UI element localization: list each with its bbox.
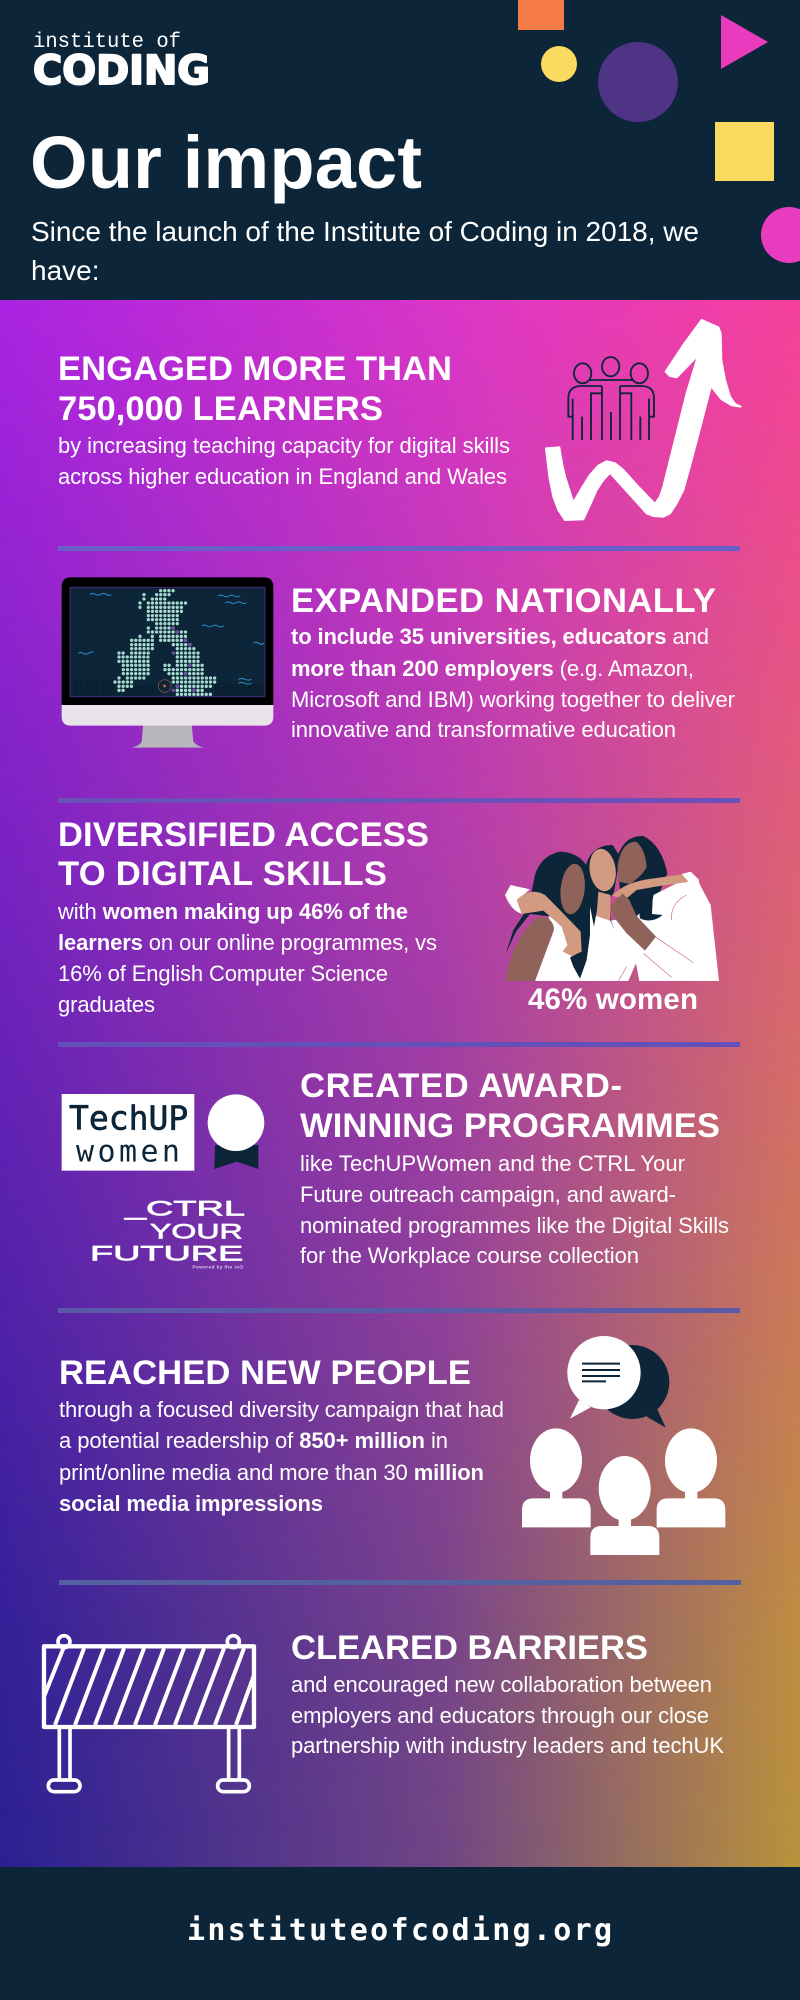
logo: CTRL your future: FUTURE xyxy=(90,1242,243,1266)
panel: cleared barriers xyxy=(44,1629,724,1792)
divider xyxy=(58,798,740,803)
text block: social media impressions xyxy=(59,1491,323,1516)
panel: diversified access xyxy=(57,816,719,1017)
text block: a potential readership of 850+ million in xyxy=(59,1428,448,1453)
title: Our impact xyxy=(30,121,422,204)
text block: and encouraged new collaboration between xyxy=(291,1672,712,1697)
text block xyxy=(59,1397,504,1516)
heading: REACHED NEW PEOPLE xyxy=(59,1354,471,1392)
logo: CTRL your future: _CTRL xyxy=(123,1197,245,1221)
heading: 750,000 LEARNERS xyxy=(58,390,383,428)
heading xyxy=(58,816,429,893)
text block: Microsoft and IBM) working together to deliver xyxy=(291,687,735,712)
heading xyxy=(300,1067,720,1145)
text block: across higher education in England and Wales xyxy=(58,464,507,489)
text block: with women making up 46% of the xyxy=(57,899,408,924)
panel: reached new people xyxy=(59,1336,725,1555)
icon: speech bubbles xyxy=(567,1336,669,1428)
text block xyxy=(300,1151,729,1268)
heading: CREATED AWARD- xyxy=(300,1067,622,1105)
text block: like TechUPWomen and the CTRL Your xyxy=(300,1151,685,1176)
text block xyxy=(57,899,437,1017)
text block xyxy=(291,1672,724,1758)
logo: TechUP women: women xyxy=(76,1135,180,1170)
heading xyxy=(58,350,452,428)
logo: CTRL your future: YOUR xyxy=(150,1219,243,1243)
logo: TechUP women xyxy=(62,1094,194,1171)
text block: 16% of English Computer Science xyxy=(58,961,388,986)
illustration: three women xyxy=(505,836,719,981)
text block xyxy=(291,624,735,742)
icon: rising arrow xyxy=(546,320,741,520)
text block: through a focused diversity campaign that had xyxy=(59,1397,504,1422)
subtitle: have: xyxy=(31,255,100,286)
icon: award ribbon xyxy=(208,1094,264,1169)
label: 46% women: 46% women xyxy=(528,983,698,1016)
panel: award-winning programmes xyxy=(62,1067,729,1271)
divider xyxy=(59,1580,741,1585)
heading: DIVERSIFIED ACCESS xyxy=(58,816,429,854)
subtitle: Since the launch of the Institute of Coding in 2018, we xyxy=(31,216,699,247)
gradient background xyxy=(0,300,800,1867)
logo: CTRL your future: Powered by the IoO xyxy=(192,1265,243,1271)
heading: CLEARED BARRIERS xyxy=(291,1629,648,1667)
icon: three people xyxy=(522,1428,725,1555)
text block: print/online media and more than 30 million xyxy=(59,1460,484,1485)
text block: to include 35 universities, educators and xyxy=(291,624,709,649)
logo: CODING xyxy=(33,48,210,94)
logo: institute of xyxy=(33,31,181,54)
logo: CTRL your future xyxy=(90,1197,245,1271)
heading: TO DIGITAL SKILLS xyxy=(58,855,387,893)
panel: expanded nationally xyxy=(62,577,735,748)
icon: road barrier xyxy=(44,1636,254,1792)
text block: for the Workplace course collection xyxy=(300,1243,639,1268)
header shapes xyxy=(518,0,800,263)
divider xyxy=(58,1308,740,1313)
footer band xyxy=(0,1867,800,2000)
text block: more than 200 employers (e.g. Amazon, xyxy=(291,656,694,681)
heading: ENGAGED MORE THAN xyxy=(58,350,452,388)
heading: EXPANDED NATIONALLY xyxy=(291,582,716,620)
panel: engaged learners xyxy=(58,320,741,520)
footer url: instituteofcoding.org xyxy=(187,1913,612,1948)
text block: partnership with industry leaders and techUK xyxy=(291,1733,724,1758)
text block: by increasing teaching capacity for digital skills xyxy=(58,433,510,458)
divider xyxy=(58,1042,740,1047)
icon: three people xyxy=(568,357,654,440)
heading: WINNING PROGRAMMES xyxy=(300,1107,720,1145)
logo: TechUP women: TechUP xyxy=(69,1098,188,1137)
icon: monitor with UK map xyxy=(62,577,273,748)
text block: nominated programmes like the Digital Skills xyxy=(300,1213,729,1238)
divider xyxy=(58,546,740,551)
text block: Future outreach campaign, and award- xyxy=(300,1182,676,1207)
text block xyxy=(58,433,510,489)
text block: innovative and transformative education xyxy=(291,717,676,742)
subtitle xyxy=(31,216,699,286)
text block: graduates xyxy=(58,992,155,1017)
text block: employers and educators through our close xyxy=(291,1703,709,1728)
text block: learners on our online programmes, vs xyxy=(58,930,437,955)
